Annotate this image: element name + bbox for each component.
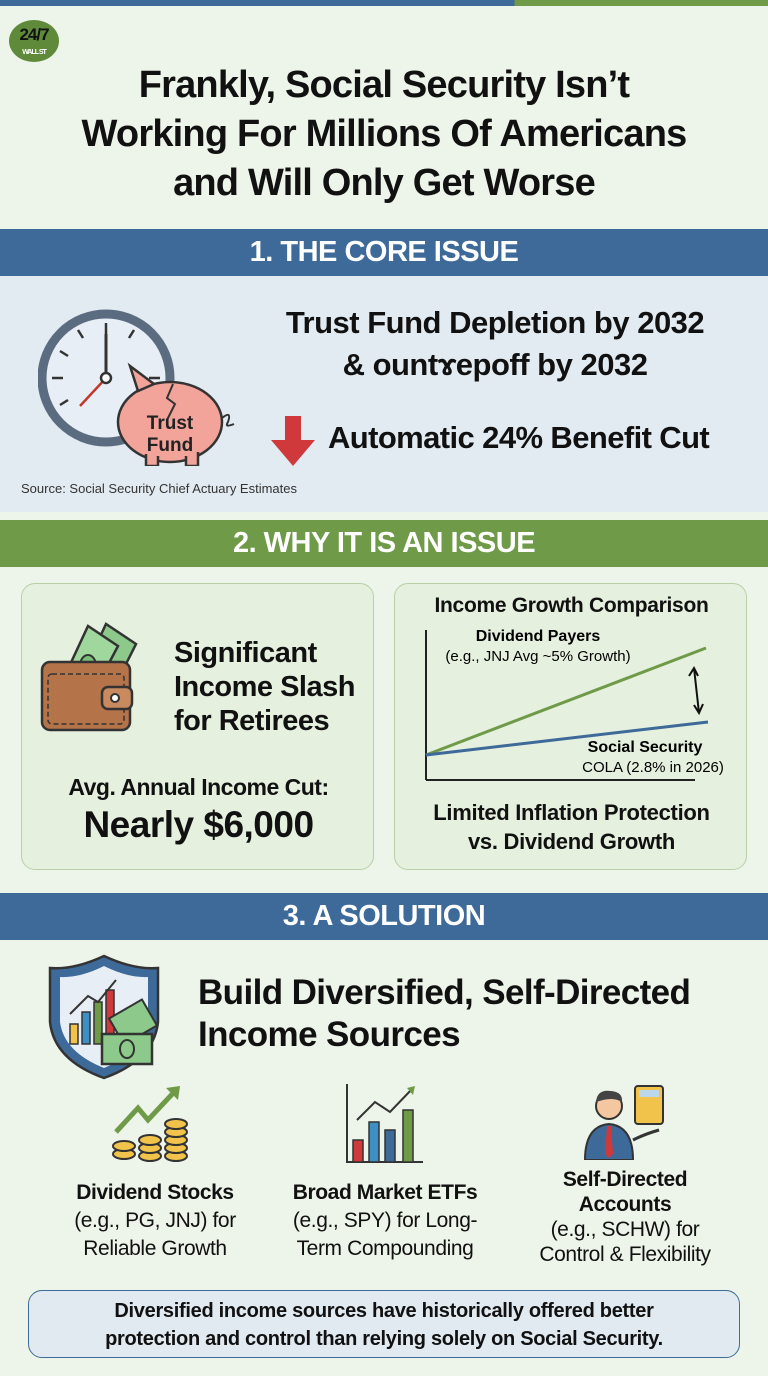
- heading: build diversified: Build Diversified, Self-Directed: [198, 973, 690, 1012]
- section 1 band: 1. THE CORE ISSUE: [250, 236, 518, 268]
- line chart: (e.g., JNJ Avg ~5% Growth): [445, 648, 631, 665]
- section 3 band: [0, 893, 768, 940]
- panel: income growth chart: [394, 583, 747, 870]
- section 3 band: 3. A SOLUTION: [283, 900, 485, 932]
- section 2 band: [0, 520, 768, 567]
- label: broad market etfs: Broad Market ETFs: [293, 1181, 477, 1204]
- title: Working For Millions Of Americans: [82, 113, 686, 155]
- headline: trust fund depletion: [286, 305, 704, 382]
- title: and Will Only Get Worse: [173, 162, 595, 204]
- icon: bar chart: [346, 1084, 423, 1163]
- item: dividend stocks: [74, 1086, 236, 1260]
- section 1 panel: [0, 276, 768, 512]
- headline: trust fund depletion: Trust Fund Depletion by 2032: [286, 305, 704, 340]
- label: dividend stocks: (e.g., PG, JNJ) for: [74, 1209, 236, 1232]
- top accent bar: [0, 0, 768, 6]
- label: self-directed: Control & Flexibility: [539, 1243, 711, 1266]
- icon: shield with money: [48, 954, 160, 1080]
- section 1 band: [0, 229, 768, 276]
- label: self-directed: Accounts: [579, 1193, 671, 1216]
- line chart: COLA (2.8% in 2026): [582, 759, 724, 776]
- logo: WALL ST: [22, 49, 46, 56]
- icon: person with calculator: [584, 1085, 664, 1160]
- icon: clock and piggy bank: Fund: [147, 435, 193, 456]
- panel: income slash: [21, 583, 374, 870]
- benefit cut: Automatic 24% Benefit Cut: [328, 420, 709, 455]
- icon: down arrow: [271, 416, 315, 466]
- icon: wallet: [40, 622, 138, 732]
- label: self-directed: (e.g., SCHW) for: [551, 1218, 699, 1241]
- headline: trust fund depletion: & ountɤepoff by 2032: [343, 347, 647, 382]
- text: significant income slash: Significant: [174, 637, 317, 669]
- heading: build diversified: Income Sources: [198, 1015, 460, 1054]
- item: broad market etfs: [293, 1084, 477, 1260]
- text: significant income slash: Income Slash: [174, 671, 355, 703]
- label: dividend stocks: Reliable Growth: [83, 1237, 227, 1260]
- logo: [9, 20, 59, 62]
- line chart: Social Security: [588, 739, 702, 756]
- label: self-directed: [539, 1168, 711, 1266]
- text: avg annual income cut: Avg. Annual Income Cut:: [68, 774, 329, 800]
- icon: clock and piggy bank: Trust: [147, 413, 194, 434]
- line chart: [425, 628, 724, 781]
- number: nearly 6000: Nearly $6,000: [83, 804, 314, 845]
- callout: conclusion: Diversified income sources have historically offered better: [114, 1300, 654, 1322]
- title: [82, 64, 686, 204]
- label: broad market etfs: (e.g., SPY) for Long-: [293, 1209, 477, 1232]
- caption: limited inflation protection: vs. Dividend Growth: [468, 829, 675, 854]
- text: significant income slash: for Retirees: [174, 705, 329, 737]
- label: broad market etfs: [293, 1181, 477, 1260]
- callout: conclusion: [28, 1290, 740, 1358]
- label: dividend stocks: [74, 1181, 236, 1260]
- title: Frankly, Social Security Isn’t: [139, 64, 629, 106]
- text: significant income slash: [174, 637, 355, 737]
- callout: conclusion: protection and control than relying solely on Social Security.: [105, 1328, 663, 1350]
- label: broad market etfs: Term Compounding: [297, 1237, 473, 1260]
- label: self-directed: Self-Directed: [563, 1168, 687, 1191]
- heading: build diversified: [198, 973, 690, 1054]
- item: self-directed accounts: [539, 1085, 711, 1266]
- label: dividend stocks: Dividend Stocks: [76, 1181, 234, 1204]
- caption: limited inflation protection: Limited Inflation Protection: [433, 800, 710, 825]
- line chart: Dividend Payers: [476, 628, 600, 645]
- source: Source: Social Security Chief Actuary Estimates: [21, 481, 297, 496]
- section 2 band: 2. WHY IT IS AN ISSUE: [233, 527, 535, 559]
- icon: coins and arrow: [112, 1086, 188, 1162]
- icon: clock and piggy bank: [38, 310, 234, 466]
- logo: 24/7: [19, 25, 49, 44]
- caption: limited inflation protection: [433, 800, 710, 854]
- chart title: Income Growth Comparison: [434, 594, 708, 617]
